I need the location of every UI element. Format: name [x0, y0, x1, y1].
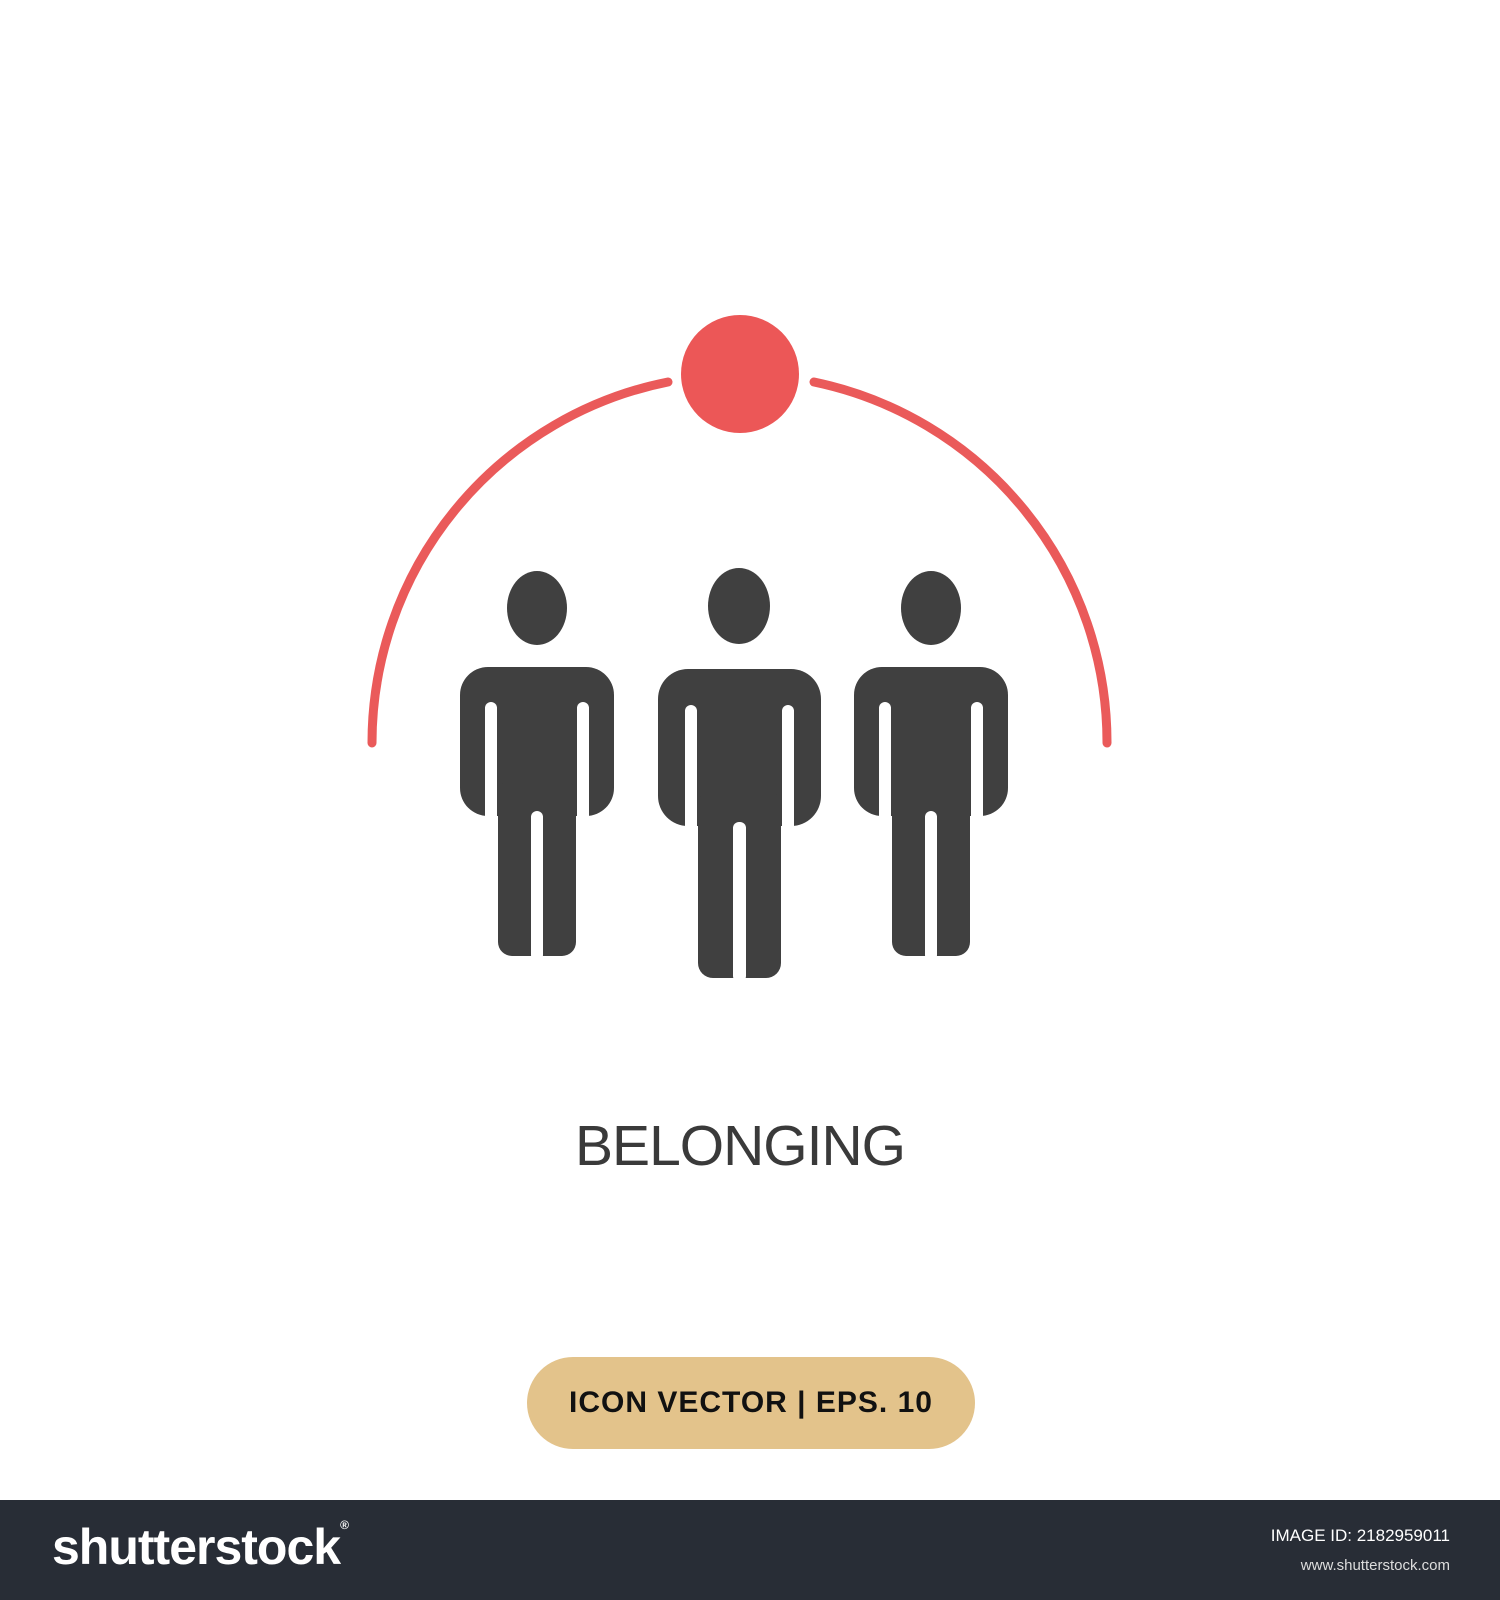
figure: left person	[460, 571, 614, 961]
icon: red node circle	[681, 315, 799, 433]
arc	[372, 382, 1107, 743]
badge: icon vector eps 10	[527, 1357, 975, 1449]
figure: right person	[854, 571, 1008, 961]
badge: icon vector eps 10: ICON VECTOR | EPS. 10	[569, 1386, 933, 1419]
title: BELONGING: BELONGING	[575, 1114, 905, 1178]
figure: middle person	[658, 568, 821, 982]
text: website: www.shutterstock.com	[1301, 1557, 1450, 1574]
text: image id: IMAGE ID: 2182959011	[1271, 1526, 1450, 1545]
logo: shutterstock: shutterstock®	[52, 1518, 348, 1575]
footer bar	[0, 1500, 1500, 1600]
